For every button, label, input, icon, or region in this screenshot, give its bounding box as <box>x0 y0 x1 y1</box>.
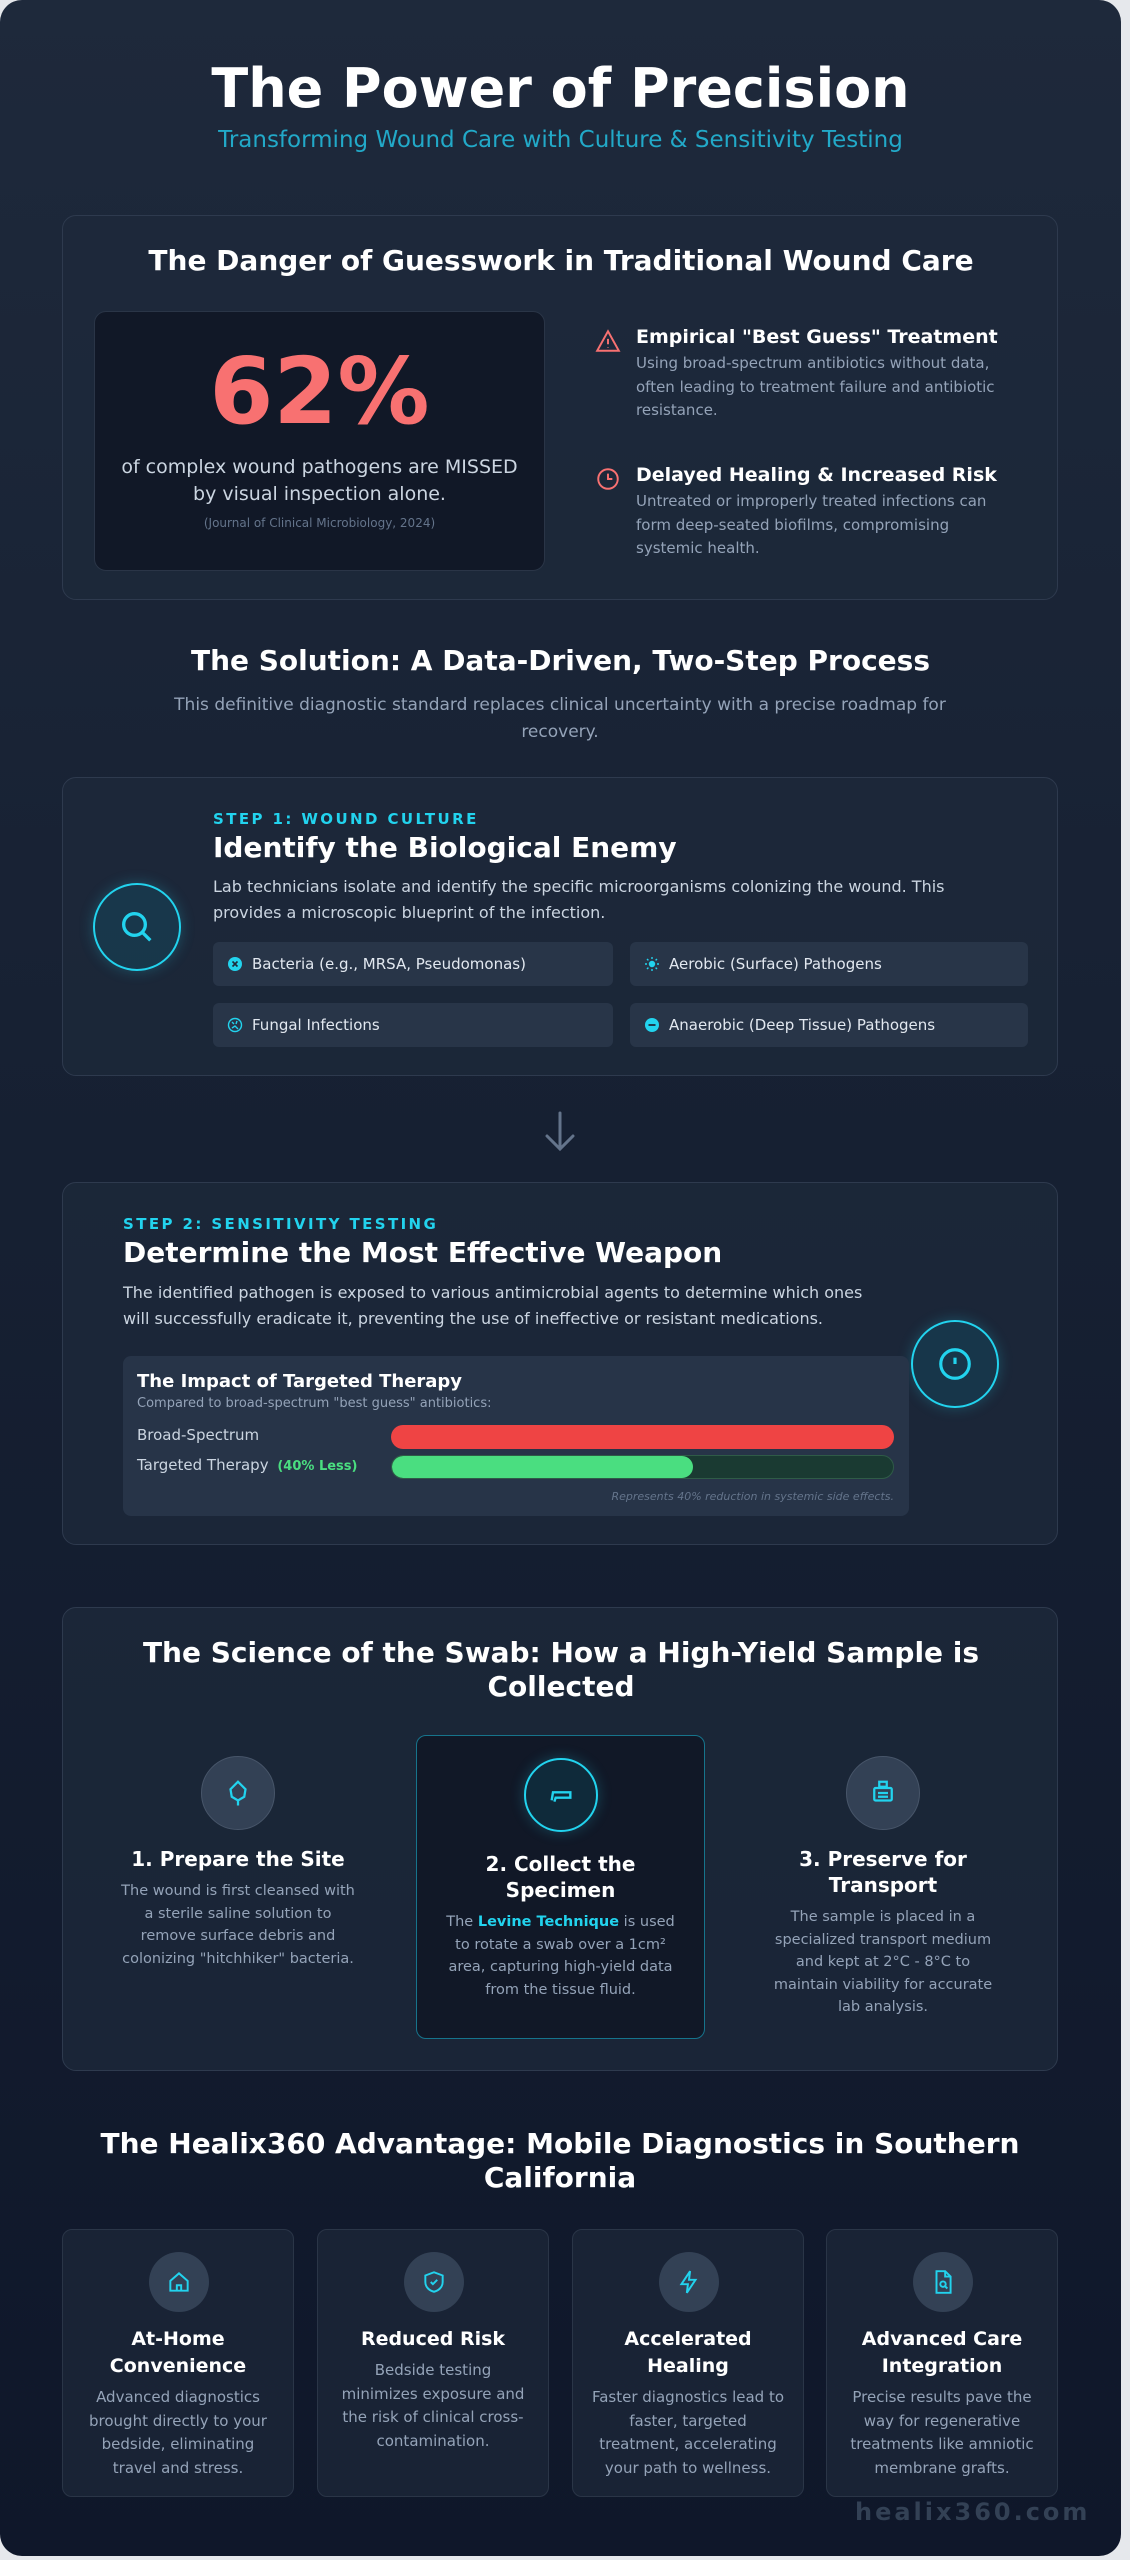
bar: targeted therapy: Targeted Therapy (40% Less) <box>137 1456 357 1474</box>
icon: clock <box>597 468 619 490</box>
heading: healix360 advantage: The Healix360 Advantage: Mobile Diagnostics in Southern California <box>101 2127 1019 2194</box>
panel: danger of guesswork: Empirical "Best Guess" Treatment <box>636 326 998 348</box>
chip: anaerobic <box>630 1003 1028 1047</box>
source: (Journal of Clinical Microbiology, 2024) <box>204 516 435 530</box>
card: reduced risk: Reduced Risk <box>361 2328 505 2350</box>
step heading: Identify the Biological Enemy <box>213 831 677 864</box>
chart: impact of targeted therapy <box>123 1356 909 1516</box>
icon: container <box>846 1756 920 1830</box>
card: reduced risk <box>317 2229 549 2497</box>
column 2: collect (highlighted): The Levine Technique is used to rotate a swab over a 1cm² area, capturing high-yield data from the tissue fluid. <box>446 1914 675 1998</box>
step label: STEP 2: SENSITIVITY TESTING <box>123 1215 438 1233</box>
panel: danger of guesswork <box>62 215 1058 600</box>
panel: danger of guesswork: Using broad-spectrum antibiotics without data, often leading to treatment failure and antibiotic resistance. <box>636 354 995 419</box>
column 3: preserve <box>774 1756 992 2015</box>
heading: danger: The Danger of Guesswork in Traditional Wound Care <box>148 244 974 277</box>
panel: danger of guesswork: Untreated or improperly treated infections can form deep-seated biofilms, compromising systemic health. <box>636 492 986 557</box>
column 3: preserve: The sample is placed in a specialized transport medium and kept at 2°C - 8°C to maintain viability for accurate lab analysis. <box>774 1909 992 2015</box>
panel: danger of guesswork: Delayed Healing & Increased Risk <box>636 464 997 486</box>
icon: shield <box>404 2252 464 2312</box>
panel: step 1 <box>62 777 1058 1076</box>
chip: aerobic: Aerobic (Surface) Pathogens <box>669 955 882 973</box>
card: at-home convenience: Advanced diagnostics brought directly to your bedside, eliminating travel and stress. <box>89 2388 267 2476</box>
card: accelerated healing <box>572 2229 804 2497</box>
card: at-home convenience: At-Home <box>131 2328 225 2350</box>
chart: impact of targeted therapy: Compared to broad-spectrum "best guess" antibiotics: <box>137 1396 491 1411</box>
column 2: collect (highlighted): 2. Collect the Specimen <box>486 1852 635 1902</box>
card: accelerated healing: Faster diagnostics lead to faster, targeted treatment, accelerating your path to wellness. <box>592 2388 784 2476</box>
icon: magnifier <box>93 883 181 971</box>
stat box: 62% <box>94 311 545 571</box>
panel: step 2 <box>62 1182 1058 1545</box>
stat caption: of complex wound pathogens are MISSED <box>121 456 518 478</box>
chart: impact of targeted therapy: The Impact of Targeted Therapy <box>137 1371 462 1392</box>
stat caption: by visual inspection alone. <box>193 483 446 505</box>
icon: warning <box>596 329 620 352</box>
chart: impact of targeted therapy: Represents 40% reduction in systemic side effects. <box>612 1490 894 1503</box>
chip: fungal: Fungal Infections <box>252 1016 380 1034</box>
column 1: prepare <box>121 1756 355 1966</box>
big stat: 62% <box>209 338 430 445</box>
chip: fungal <box>213 1003 613 1047</box>
chip: bacteria: Bacteria (e.g., MRSA, Pseudomonas) <box>252 955 526 973</box>
panel: science of the swab <box>62 1607 1058 2071</box>
card: advanced care integration: Precise results pave the way for regenerative treatments like amniotic membrane grafts. <box>850 2388 1034 2476</box>
column 1: prepare: The wound is first cleansed with a sterile saline solution to remove surface debris and colonizing "hitchhiker" bacteria. <box>121 1883 355 1966</box>
chip: aerobic <box>630 942 1028 986</box>
chip: bacteria <box>213 942 613 986</box>
step paragraph: The identified pathogen is exposed to various antimicrobial agents to determine which ones will successfully eradicate it, preventing the use of ineffective or resistant medications. <box>123 1283 862 1328</box>
card: at-home convenience <box>62 2229 294 2497</box>
item: delayed healing <box>597 464 998 557</box>
icon: power/target <box>911 1320 999 1408</box>
column 3: preserve: 3. Preserve for Transport <box>799 1847 967 1897</box>
step label: STEP 1: WOUND CULTURE <box>213 810 479 828</box>
watermark: healix360.com <box>855 2498 1090 2526</box>
icon: drop <box>201 1756 275 1830</box>
icon: document search <box>913 2252 973 2312</box>
heading: swab: The Science of the Swab: How a High-Yield Sample is Collected <box>143 1636 979 1703</box>
step paragraph: Lab technicians isolate and identify the specific microorganisms colonizing the wound. This provides a microscopic blueprint of the infection. <box>213 877 944 922</box>
solution paragraph: This definitive diagnostic standard replaces clinical uncertainty with a precise roadmap for recovery. <box>174 695 946 742</box>
heading: solution: The Solution: A Data-Driven, Two-Step Process <box>191 644 930 677</box>
card: accelerated healing: Healing <box>647 2355 729 2377</box>
card: reduced risk: Bedside testing minimizes exposure and the risk of clinical cross-contamination. <box>342 2361 524 2450</box>
chip: anaerobic: Anaerobic (Deep Tissue) Pathogens <box>669 1016 935 1034</box>
arrow: down <box>546 1112 574 1151</box>
column 1: prepare: 1. Prepare the Site <box>131 1847 345 1871</box>
subtitle: Transforming Wound Care with Culture & Sensitivity Testing <box>218 127 903 153</box>
card: at-home convenience: Convenience <box>110 2355 246 2377</box>
card: advanced care integration: Advanced Care <box>862 2328 1022 2350</box>
title: The Power of Precision <box>211 57 910 120</box>
card: advanced care integration: Integration <box>882 2355 1002 2377</box>
item: empirical treatment <box>596 326 998 419</box>
bar: broad spectrum: Broad-Spectrum <box>137 1426 259 1444</box>
icon: home <box>149 2252 209 2312</box>
icon: lightning <box>659 2252 719 2312</box>
stat caption <box>121 456 518 505</box>
icon: swab <box>524 1758 598 1832</box>
column 2: collect (highlighted) <box>416 1735 705 2039</box>
card: advanced care integration <box>826 2229 1058 2497</box>
card: accelerated healing: Accelerated <box>624 2328 752 2350</box>
step heading: Determine the Most Effective Weapon <box>123 1236 722 1269</box>
